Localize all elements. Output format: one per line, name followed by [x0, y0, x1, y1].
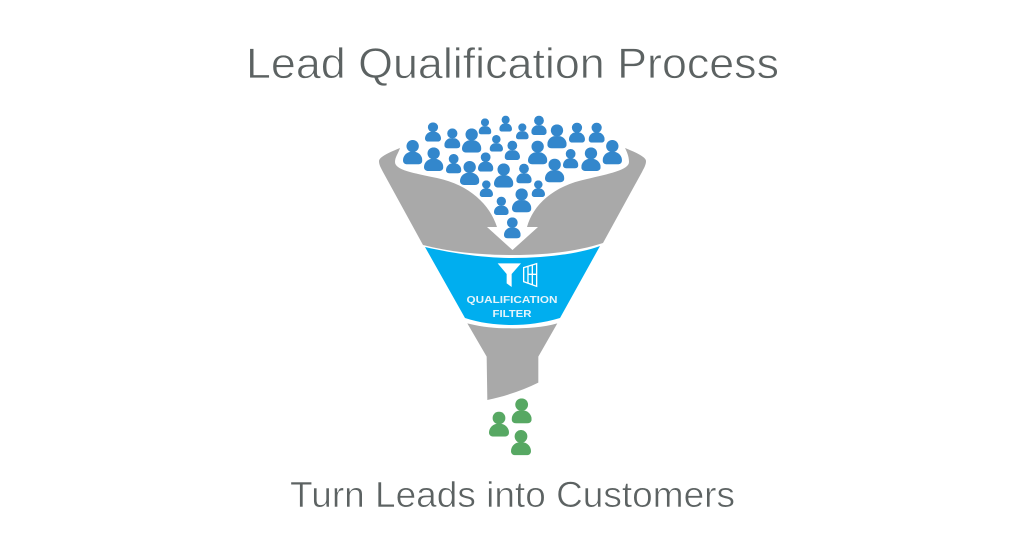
- icon: filter funnel: [498, 263, 521, 287]
- customers group: [489, 398, 532, 455]
- title: Lead Qualification Process: [246, 40, 779, 88]
- funnel illustration: [379, 148, 646, 400]
- filter label: FILTER: [492, 308, 532, 320]
- funnel upper body: [379, 148, 646, 255]
- subtitle: Turn Leads into Customers: [290, 474, 735, 515]
- filter label: QUALIFICATION: [466, 294, 558, 306]
- funnel lower spout: [467, 323, 557, 400]
- leads crowd: [403, 116, 622, 238]
- blue filter band: [425, 246, 600, 325]
- filter label: [466, 294, 558, 320]
- icon: filter panel: [524, 264, 537, 286]
